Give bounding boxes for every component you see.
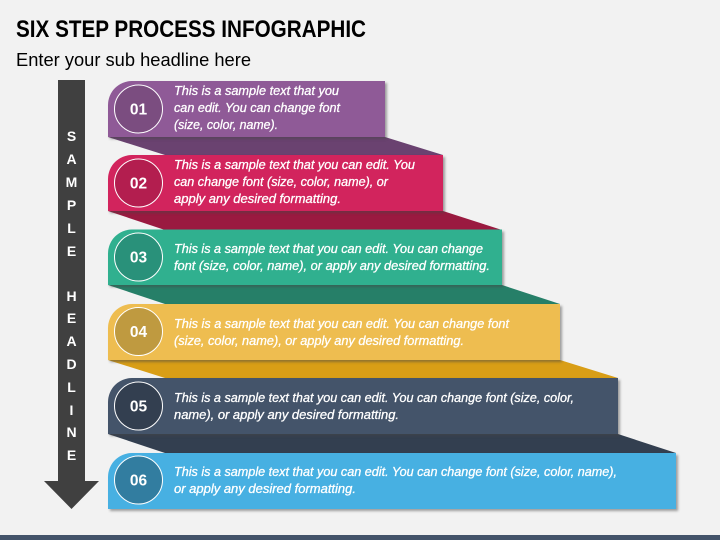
title: SIX STEP PROCESS INFOGRAPHIC <box>16 16 366 43</box>
vertical arrow with sample headline: L <box>67 379 76 395</box>
step 05: 05 <box>130 398 147 416</box>
step 04: 04 <box>130 324 147 341</box>
vertical arrow with sample headline: E <box>67 310 76 326</box>
vertical arrow with sample headline <box>44 80 99 509</box>
step 04: (size, color, name), or apply any desired formatting. <box>174 333 464 348</box>
fold: step 5 to 6 <box>108 434 676 453</box>
fold: step 2 to 3 <box>108 211 502 230</box>
step 06: or apply any desired formatting. <box>174 481 356 496</box>
vertical arrow with sample headline: L <box>67 220 76 236</box>
step 06: This is a sample text that you can edit. You can change font (size, color, name), <box>174 464 617 479</box>
step 01: 01 <box>130 102 147 118</box>
step 02: 02 <box>130 176 147 192</box>
vertical arrow with sample headline: I <box>70 402 73 418</box>
vertical arrow with sample headline: M <box>66 174 77 190</box>
step 01: This is a sample text that you <box>174 83 339 98</box>
fold: step 3 to 4 <box>108 285 560 304</box>
step 02: can change font (size, color, name), or <box>174 174 389 189</box>
step 02: apply any desired formatting. <box>174 191 341 206</box>
vertical arrow with sample headline: N <box>66 424 77 440</box>
step 03: 03 <box>130 250 147 266</box>
step 01: can edit. You can change font <box>174 100 341 115</box>
step 02 <box>108 155 445 213</box>
vertical arrow with sample headline: E <box>67 243 76 259</box>
step 06: 06 <box>130 472 147 490</box>
vertical arrow with sample headline: P <box>67 197 76 213</box>
step 06 <box>108 453 678 511</box>
fold: step 4 to 5 <box>108 360 618 378</box>
step 05 <box>108 378 620 436</box>
step 03 <box>108 230 504 287</box>
step 05: name), or apply any desired formatting. <box>174 407 399 422</box>
vertical arrow with sample headline: A <box>66 151 77 167</box>
vertical arrow with sample headline: H <box>66 288 77 304</box>
step 04 <box>108 304 562 362</box>
sub headline: Enter your sub headline here <box>16 49 251 70</box>
step 03: This is a sample text that you can edit. You can change <box>174 241 483 256</box>
step 01 <box>108 81 387 139</box>
step 03: font (size, color, name), or apply any desired formatting. <box>174 258 490 273</box>
step 05: This is a sample text that you can edit. You can change font (size, color, <box>174 390 574 405</box>
fold: step 1 to 2 <box>108 137 443 155</box>
vertical arrow with sample headline: S <box>67 128 76 144</box>
footer band <box>0 535 720 540</box>
step 02: This is a sample text that you can edit. You <box>174 157 415 172</box>
vertical arrow with sample headline: A <box>66 333 77 349</box>
step 04: This is a sample text that you can edit. You can change font <box>174 316 510 331</box>
vertical arrow with sample headline: D <box>66 356 77 372</box>
vertical arrow with sample headline: E <box>67 447 76 463</box>
step 01: (size, color, name). <box>174 117 278 132</box>
